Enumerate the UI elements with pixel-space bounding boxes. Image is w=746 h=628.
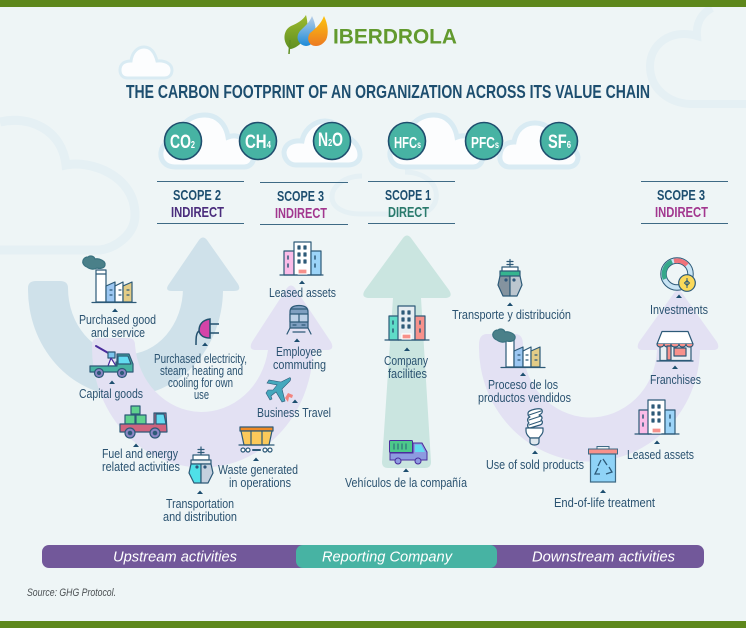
icon: airplane — [266, 378, 293, 402]
label: purchased electricity: cooling for own — [168, 376, 233, 390]
icon: company truck — [390, 440, 427, 464]
activities bar: Reporting Company — [322, 548, 453, 566]
label: use of sold products — [486, 450, 584, 472]
label: investments: Investments — [650, 302, 708, 317]
gas: CH4: CH4 — [245, 132, 271, 153]
icon: waste wagon — [239, 427, 274, 452]
label: company facilities: Company — [384, 353, 428, 368]
label: vehiculos de la compania — [345, 468, 468, 490]
label: waste generated in operations: in operations — [229, 475, 291, 490]
logo: Iberdrola: IBERDROLA — [333, 24, 457, 48]
label: transportation and distribution — [163, 490, 237, 524]
label: leased assets downstream — [627, 440, 694, 462]
gas: N2O: N2O — [318, 130, 343, 151]
label: transporte y distribucion — [452, 302, 571, 322]
bottom band — [0, 621, 746, 628]
white clouds behind gases — [161, 115, 578, 167]
gas: HFCs: HFCs — [394, 135, 421, 152]
label: leased assets upstream — [269, 280, 336, 300]
label: purchased good and service: Purchased good — [79, 312, 156, 327]
icon: building, leased assets downstream — [635, 400, 679, 434]
gas: N2O — [314, 122, 350, 160]
gas: SF6: SF6 — [548, 132, 571, 153]
label: employee commuting — [273, 338, 326, 372]
background cloud outlines — [0, 8, 746, 250]
label: proceso de los productos vendidos: productos vendidos — [478, 390, 571, 405]
scope 2 heading: SCOPE 2 — [173, 187, 221, 204]
label: fuel and energy related activities: related activities — [102, 459, 180, 474]
label: proceso de los productos vendidos — [478, 372, 571, 405]
label: leased assets downstream: Leased assets — [627, 447, 694, 462]
gas: CO2 — [164, 122, 202, 160]
scope 3 heading (upstream) — [260, 182, 348, 224]
label: purchased electricity: steam, heating and — [160, 364, 243, 378]
icon: building, company facilities — [385, 306, 429, 340]
arrow: scope 3 downstream lavender — [479, 290, 718, 462]
label: end-of-life treatment — [554, 490, 655, 510]
label: proceso de los productos vendidos: Proceso de los — [488, 377, 558, 392]
label: fuel and energy related activities — [102, 444, 180, 474]
label: purchased electricity: use — [194, 388, 209, 402]
label: leased assets upstream: Leased assets — [269, 285, 336, 300]
icon: ship, transportation — [189, 447, 213, 483]
activities bar — [42, 545, 704, 568]
gas: PFCs: PFCs — [471, 135, 499, 152]
label: purchased good and service: and service — [91, 325, 145, 340]
icon: grey ship — [498, 260, 522, 296]
source note: Source: GHG Protocol. — [27, 587, 116, 599]
scope 3 heading (upstream): INDIRECT — [275, 205, 327, 222]
icon: building, leased assets upstream — [280, 242, 323, 275]
icon: recycling bin — [588, 446, 618, 482]
label: waste generated in operations — [218, 458, 298, 490]
logo: Iberdrola — [284, 15, 457, 54]
arrow: scope 3 upstream lavender — [92, 286, 332, 468]
label: transporte y distribucion: Transporte y distribución — [452, 307, 571, 322]
label: vehiculos de la compania: Vehículos de la compañía — [345, 475, 468, 490]
label: franchises: Franchises — [650, 372, 701, 387]
label: employee commuting: commuting — [273, 357, 326, 372]
label: use of sold products: Use of sold products — [486, 457, 584, 472]
label: capital goods — [79, 380, 143, 401]
scope 3 heading (upstream): SCOPE 3 — [277, 188, 324, 205]
label: purchased good and service — [79, 308, 156, 340]
label: employee commuting: Employee — [276, 344, 322, 359]
gas: PFCs — [466, 122, 502, 160]
small cloud — [120, 47, 172, 78]
label: investments — [650, 294, 708, 317]
gas: CH4 — [240, 122, 276, 160]
scope 1 heading: DIRECT — [388, 204, 429, 221]
scope 3 heading (downstream): SCOPE 3 — [657, 187, 705, 204]
gas: HFCs — [388, 122, 426, 160]
arrow: scope 2 blue — [28, 238, 239, 396]
label: fuel and energy related activities: Fuel and energy — [102, 446, 178, 461]
label: transportation and distribution: Transportation — [166, 496, 234, 511]
label: business travel: Business Travel — [257, 405, 331, 420]
label: purchased electricity — [154, 342, 247, 402]
icon: investments donut and coin — [664, 260, 695, 291]
icon: train — [287, 306, 311, 334]
label: waste generated in operations: Waste generated — [218, 462, 298, 477]
label: business travel — [257, 400, 331, 420]
activities bar: Upstream activities — [113, 548, 237, 566]
label: company facilities: facilities — [388, 366, 427, 381]
scope 1 heading — [368, 182, 455, 224]
label: franchises — [650, 366, 701, 387]
label: company facilities — [384, 348, 428, 381]
icon: crane truck, capital goods — [90, 346, 133, 378]
label: capital goods: Capital goods — [79, 386, 143, 401]
label: purchased electricity: Purchased electricity, — [154, 352, 247, 366]
icon: cargo truck, fuel and energy — [120, 406, 167, 438]
scope 3 heading (downstream): INDIRECT — [655, 204, 708, 221]
gas: CO2: CO2 — [170, 132, 195, 153]
icon: factory, purchased goods — [83, 256, 136, 302]
activities bar: Downstream activities — [532, 548, 675, 566]
icon: factory, productos vendidos — [493, 329, 545, 368]
icon: shop, franchises — [657, 332, 693, 361]
icon: power plug — [196, 319, 219, 345]
label: end-of-life treatment: End-of-life treatment — [554, 495, 655, 510]
scope 1 heading: SCOPE 1 — [385, 187, 431, 204]
scope 2 heading: INDIRECT — [171, 204, 224, 221]
icon: light bulb — [526, 409, 543, 445]
scope 3 heading (downstream) — [641, 182, 728, 224]
top band — [0, 0, 746, 7]
arrow: scope 1 green — [363, 236, 451, 468]
label: transportation and distribution: and distribution — [163, 509, 237, 524]
scope 2 heading — [157, 182, 244, 224]
gas: SF6 — [540, 122, 578, 160]
